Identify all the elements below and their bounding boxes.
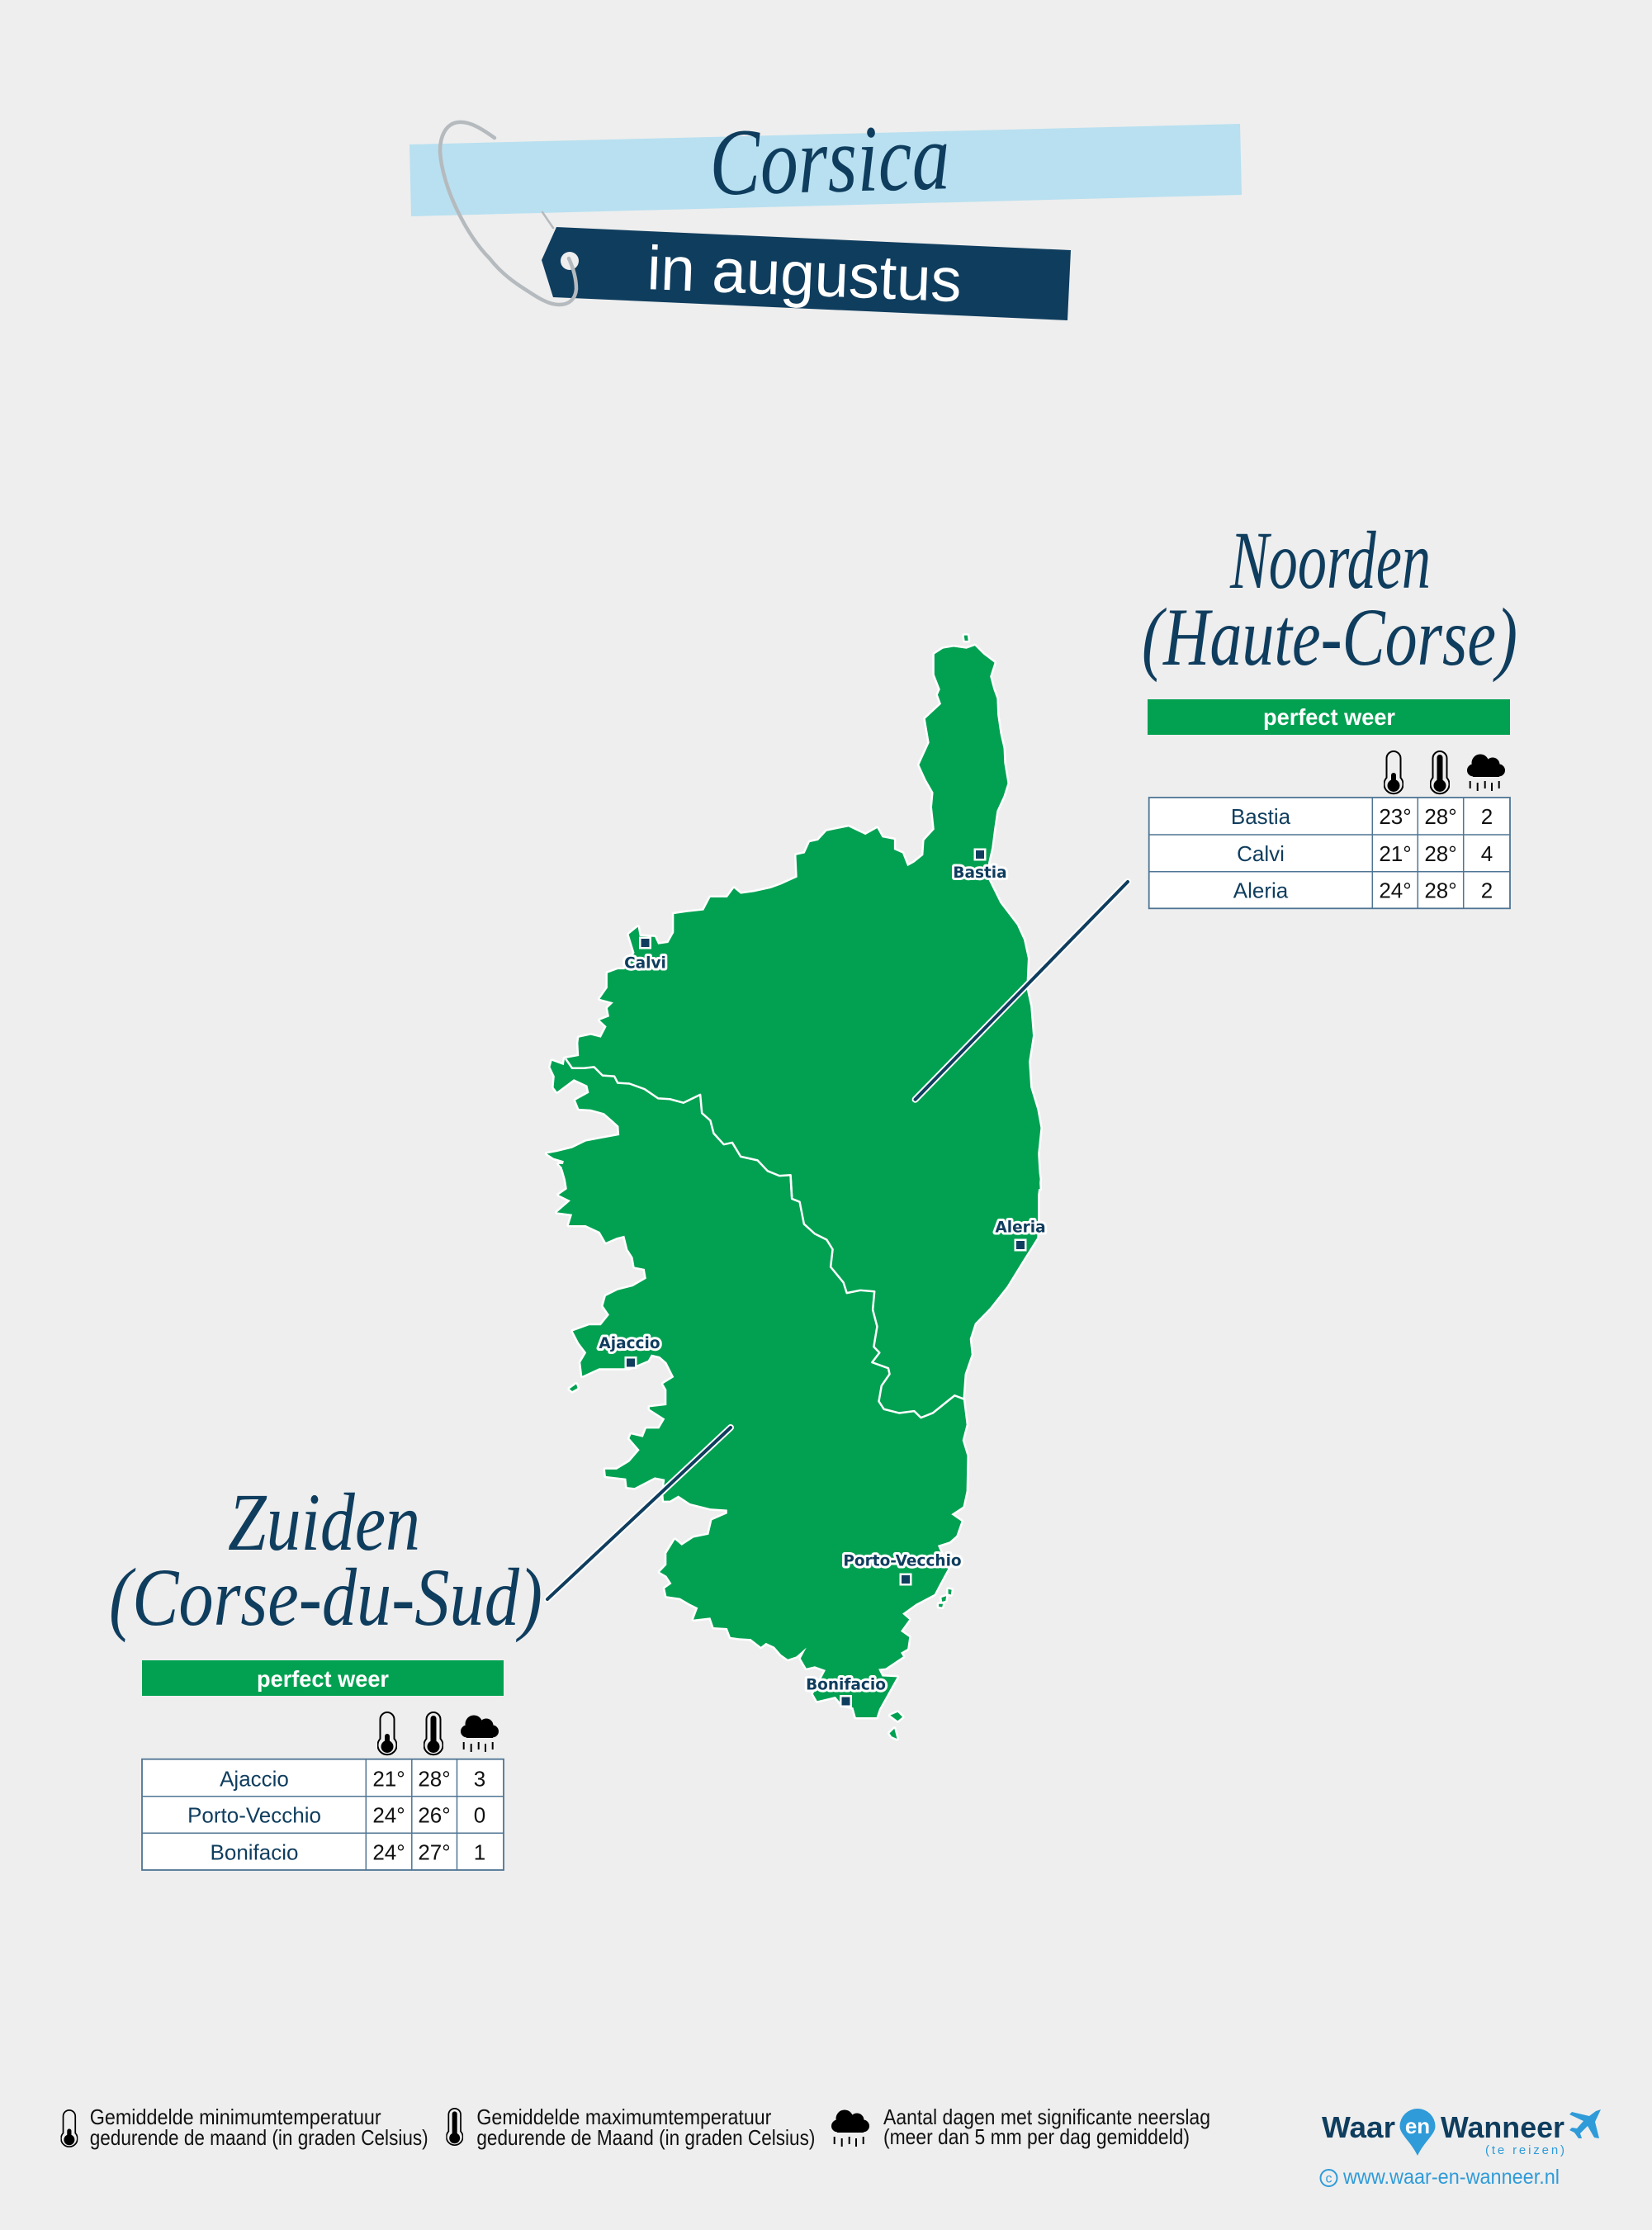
table icons north [1384,751,1505,793]
marker and label: Porto-Vecchio: Porto-Vecchio [843,1552,962,1570]
legend: maximum temperature [447,2105,815,2150]
legend: minimum temperature: gedurende de maand (in graden Celsius) [90,2125,428,2150]
region border [566,1058,965,1418]
status bar south [142,1660,504,1696]
table north: 2 [1481,804,1493,829]
table south: Bonifacio [211,1839,298,1864]
tag ring [440,122,576,305]
table north: Bastia [1231,804,1291,829]
heading: Noorden (Haute-Corse): (Haute-Corse) [1142,591,1517,683]
website credit: c [1326,2171,1332,2186]
table north: 4 [1481,841,1493,866]
title banner: Corsica: Corsica [708,104,951,215]
status bar south: perfect weer [257,1666,389,1692]
legend: maximum temperature: Gemiddelde maximumtemperatuur [476,2105,772,2129]
logo: Waar en Wanneer: (te reizen) [1485,2143,1564,2157]
legend: precipitation [831,2105,1210,2149]
legend: minimum temperature [61,2105,428,2150]
logo: Waar en Wanneer: en [1405,2114,1430,2138]
table north: 28° [1424,804,1457,829]
table north: 21° [1379,841,1412,866]
table south: 24° [372,1803,405,1828]
website credit: www.waar-en-wanneer.nl [1342,2166,1560,2189]
logo: Waar en Wanneer [1322,2109,1601,2157]
icon: airplane [1569,2109,1601,2138]
table north: Aleria [1233,878,1289,903]
marker and label: Bastia [953,849,1007,882]
heading: Zuiden (Corse-du-Sud): Zuiden [228,1476,420,1568]
table north: 28° [1424,878,1457,903]
table north: Calvi [1237,841,1285,866]
icon: map pin [1400,2109,1435,2156]
table south: 26° [418,1803,451,1828]
table south: 0 [474,1803,485,1828]
legend: precipitation: (meer dan 5 mm per dag gemiddeld) [883,2124,1190,2149]
title tag: in augustus: in augustus [646,233,963,315]
status bar north [1148,699,1510,735]
leader line north [916,882,1128,1100]
table south: 1 [474,1839,485,1864]
marker and label: Ajaccio [599,1335,660,1369]
legend: minimum temperature: Gemiddelde minimumtemperatuur [90,2105,381,2129]
table south: 3 [474,1766,485,1791]
table south: Porto-Vecchio [187,1803,321,1828]
table south [142,1759,504,1870]
heading: Noorden (Haute-Corse) [1142,514,1517,683]
marker and label: Bonifacio [806,1676,886,1707]
heading: Zuiden (Corse-du-Sud): (Corse-du-Sud) [109,1551,542,1643]
table north: 24° [1379,878,1412,903]
map of Corsica [547,636,1040,1739]
status bar north: perfect weer [1263,704,1395,730]
table north: 23° [1379,804,1412,829]
table south: Ajaccio [220,1766,289,1791]
marker and label: Calvi [624,936,666,973]
logo: Waar en Wanneer: Waar [1322,2110,1395,2144]
marker and label: Aleria [995,1219,1046,1252]
table south: 24° [372,1839,405,1864]
heading: Noorden (Haute-Corse): Noorden [1229,514,1431,606]
marker and label: Aleria: Aleria [995,1219,1046,1237]
legend: maximum temperature: gedurende de Maand (in graden Celsius) [476,2125,815,2150]
marker and label: Calvi: Calvi [624,954,666,973]
leader line south [547,1427,731,1599]
marker and label: Porto-Vecchio [843,1552,962,1585]
table south: 28° [418,1766,451,1791]
logo: Waar en Wanneer: Wanneer [1441,2110,1564,2144]
table north: 2 [1481,878,1493,903]
title tag: in augustus [542,227,1071,320]
table north [1149,798,1510,908]
table icons south [378,1712,499,1754]
title banner: Corsica [409,104,1242,216]
legend: precipitation: Aantal dagen met significante neerslag [883,2105,1210,2129]
heading: Zuiden (Corse-du-Sud) [109,1476,542,1643]
table south: 27° [418,1839,451,1864]
table north: 28° [1424,841,1457,866]
marker and label: Bastia: Bastia [953,864,1007,882]
marker and label: Bonifacio: Bonifacio [806,1676,886,1694]
marker and label: Ajaccio: Ajaccio [599,1335,660,1352]
table south: 21° [372,1766,405,1791]
